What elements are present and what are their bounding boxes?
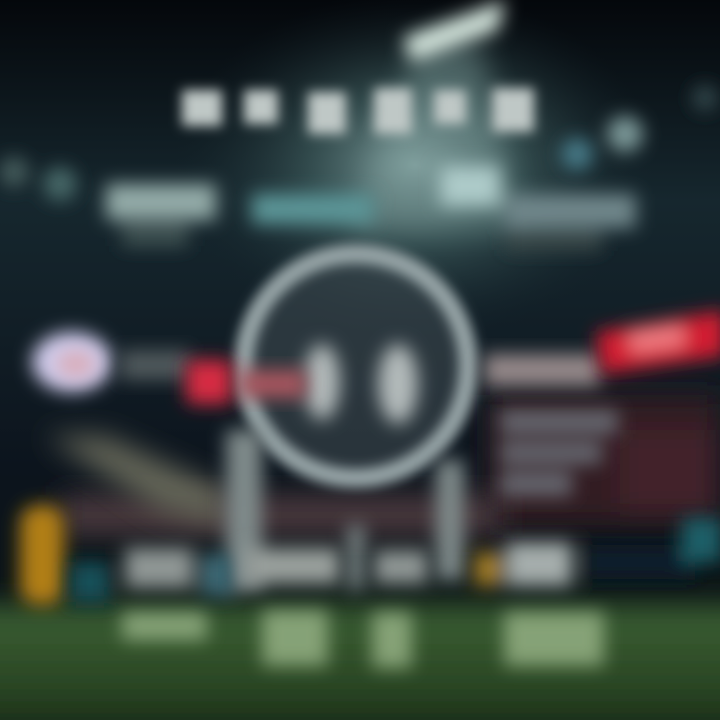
subtitle row: [106, 166, 636, 250]
ad board row: [70, 518, 720, 602]
light beam: [350, 40, 520, 230]
top pennant shape: [403, 0, 505, 62]
left small marks: [0, 157, 77, 201]
yellow player: [20, 505, 64, 605]
left badge: [32, 332, 112, 392]
central ring: [244, 254, 468, 478]
crowd panel right: [490, 395, 720, 525]
crowd band: [60, 495, 500, 535]
left connector: [120, 350, 190, 380]
left diagonal text: [46, 436, 225, 525]
pitch: [0, 605, 720, 720]
goal posts: [226, 430, 464, 590]
spotlight glow: [175, 0, 655, 340]
red banner: [596, 310, 720, 374]
top right marks: [561, 85, 718, 170]
right text block: [500, 410, 618, 496]
title row: [182, 88, 534, 134]
right connector: [484, 354, 600, 386]
pitch text blurs: [122, 610, 604, 668]
small red label: [240, 370, 306, 398]
red marker: [186, 360, 232, 404]
ring inner figures: [304, 344, 418, 424]
